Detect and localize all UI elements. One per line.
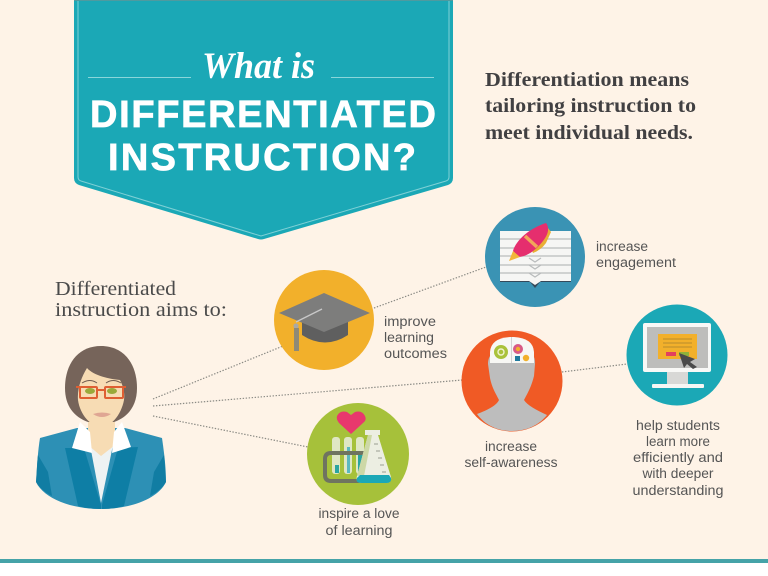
- footer strip: [0, 559, 768, 576]
- icon: head with brain: [462, 330, 562, 432]
- definition text: Differentiation means: [485, 69, 689, 91]
- intro text: [55, 278, 227, 321]
- heading: Differentiated Instruction: INSTRUCTION?: [108, 137, 416, 179]
- definition text: [485, 69, 696, 144]
- label: increase self-awareness: [464, 439, 558, 470]
- label: help students: with deeper: [641, 466, 714, 481]
- icon: book and pen: [485, 207, 585, 307]
- label: help students: efficiently and: [633, 450, 723, 465]
- label: inspire a love of learning: [318, 506, 400, 538]
- label: inspire a love of learning: of learning: [326, 523, 392, 538]
- definition text: meet individual needs.: [485, 122, 693, 144]
- label: help students: help students: [636, 418, 720, 433]
- label: help students: [632, 418, 724, 498]
- label: increase engagement: increase: [596, 239, 648, 254]
- label: inspire a love of learning: inspire a love: [318, 506, 400, 521]
- heading: What is: What is: [202, 46, 315, 87]
- icon: test tubes and heart: [307, 403, 409, 505]
- icon: graduation cap: [274, 270, 374, 370]
- label: improve learning outcomes: [384, 314, 447, 361]
- banner: title: [74, 0, 453, 240]
- icon: computer monitor: [626, 304, 728, 406]
- label: increase self-awareness: increase: [485, 439, 537, 454]
- dotted connector lines: [153, 267, 627, 447]
- label: increase engagement: engagement: [596, 255, 676, 270]
- label: improve learning outcomes: learning: [384, 330, 434, 345]
- heading: Differentiated Instruction: DIFFERENTIATED: [90, 94, 436, 136]
- intro text: Differentiated: [55, 278, 176, 300]
- definition text: tailoring instruction to: [485, 95, 696, 117]
- intro text: instruction aims to:: [55, 299, 227, 321]
- label: improve learning outcomes: outcomes: [384, 346, 447, 361]
- label: help students: learn more: [646, 434, 710, 449]
- label: improve learning outcomes: improve: [384, 314, 436, 329]
- heading: Differentiated Instruction: [90, 94, 436, 179]
- label: increase engagement: [596, 239, 676, 270]
- label: help students: understanding: [632, 483, 724, 498]
- label: increase self-awareness: self-awareness: [464, 455, 558, 470]
- icon: teacher: [36, 346, 166, 509]
